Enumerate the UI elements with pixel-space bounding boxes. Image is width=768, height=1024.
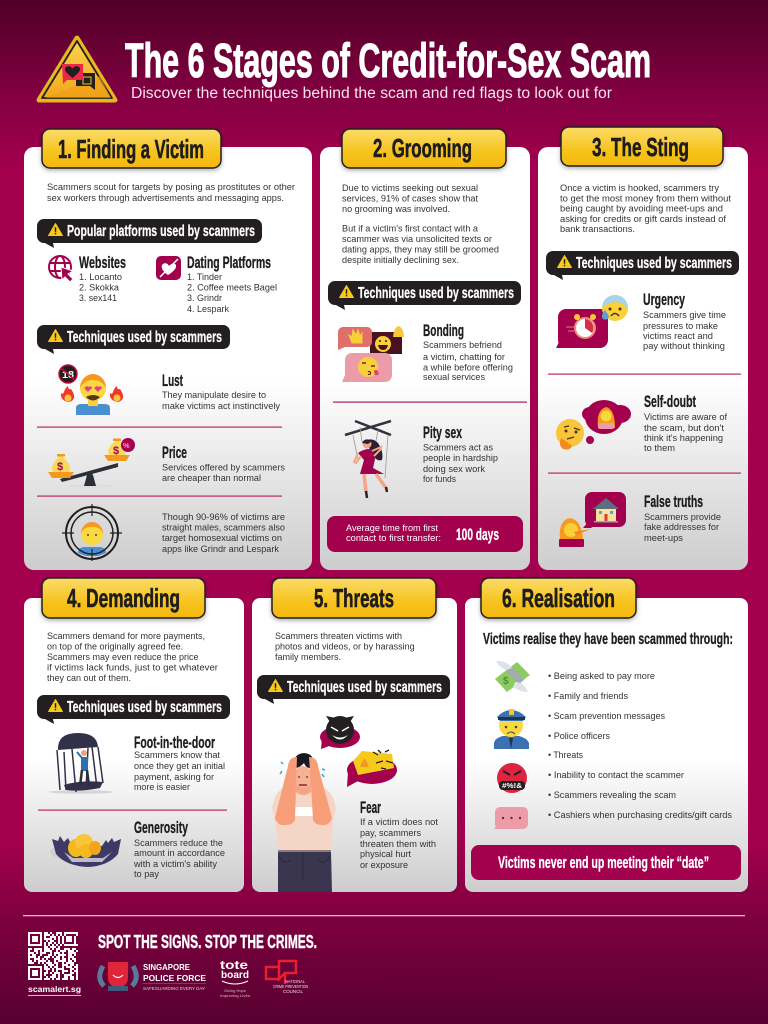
icon: weighing scale with money bags: % xyxy=(123,441,130,450)
icon: weighing scale with money bags: $ xyxy=(57,461,63,473)
heading: 2. Grooming xyxy=(342,129,506,168)
list of realisation triggers: • Family and friends xyxy=(548,691,628,701)
logo: Singapore Police Force: SAFEGUARDING EVERY DAY xyxy=(143,986,205,991)
icon: devil face bubble xyxy=(320,716,360,749)
heading: 4. Demanding xyxy=(42,578,205,618)
heading: 5. Threats: 5. Threats xyxy=(314,583,394,613)
pity sex text: for funds xyxy=(423,474,456,484)
banner: average time: 100 days xyxy=(456,526,499,544)
false truths text: fake addresses for xyxy=(644,522,719,532)
heading: 5. Threats xyxy=(272,578,436,618)
label: techniques: Techniques used by scammers xyxy=(287,679,442,696)
intro text: dating apps, they may still be groomed xyxy=(342,244,499,254)
logo: Tote Board xyxy=(220,958,250,998)
list of realisation triggers: • Being asked to pay more xyxy=(548,671,655,681)
icon: chat bubbles with emojis xyxy=(338,326,404,382)
self-doubt text: think it's happening xyxy=(644,433,723,443)
intro text: Due to victims seeking out sexual xyxy=(342,183,478,193)
intro text: on top of the originally agreed fee. xyxy=(47,642,183,652)
bonding text xyxy=(423,322,513,382)
icon: money with wings xyxy=(495,661,530,692)
icon: weighing scale with money bags xyxy=(48,438,135,488)
self-doubt text xyxy=(644,393,727,453)
price text: Price xyxy=(162,444,187,462)
panel: 3. The Sting xyxy=(538,127,748,570)
dating platforms list: 4. Lespark xyxy=(187,304,229,314)
label: techniques xyxy=(257,675,450,704)
intro text: Scammers threaten victims with xyxy=(275,631,402,641)
target text: apps like Grindr and Lespark xyxy=(162,544,280,554)
intro text: despite initially declining sex. xyxy=(342,255,459,265)
pity sex text: people in hardship xyxy=(423,453,498,463)
intro text: no grooming was involved. xyxy=(342,204,450,214)
heading: 1. Finding a Victim: 1. Finding a Victim xyxy=(58,134,204,164)
foot-in-the-door text xyxy=(134,734,225,792)
banner: average time: contact to first transfer: xyxy=(346,533,441,543)
icon: weighing scale with money bags: $ xyxy=(113,445,119,457)
fear text: If a victim does not xyxy=(360,817,439,827)
intro text: Scammers demand for more payments, xyxy=(47,631,205,641)
target text: target homosexual victims on xyxy=(162,533,282,543)
label: techniques xyxy=(328,281,521,310)
illustration: distressed man xyxy=(272,753,336,892)
icon: man in crosshair target xyxy=(62,504,122,561)
price text xyxy=(162,444,285,483)
foot-in-the-door text: Scammers know that xyxy=(134,750,221,760)
dating platforms list: 1. Tinder xyxy=(187,272,222,282)
heading: 2. Grooming: 2. Grooming xyxy=(373,133,472,163)
panel: 4. Demanding xyxy=(24,578,244,892)
heading: 6. Realisation: 6. Realisation xyxy=(502,583,615,613)
intro text: services, 91% of cases show that xyxy=(342,194,479,204)
logo: Singapore Police Force: POLICE FORCE xyxy=(143,973,206,983)
icon: money with wings: $ xyxy=(503,676,509,687)
logo: Singapore Police Force: SINGAPORE xyxy=(143,962,190,972)
generosity text: Generosity xyxy=(134,819,189,837)
icon: bear trap with coins xyxy=(50,834,121,867)
target text: straight males, scammers also xyxy=(162,522,285,532)
intro text: sex workers through advertisements and messaging apps. xyxy=(47,193,284,203)
logo: Tote Board: tote xyxy=(220,958,248,972)
intro text: Once a victim is hooked, scammers try xyxy=(560,183,720,193)
bonding text: sexual services xyxy=(423,372,485,382)
icon: woman puppet on strings xyxy=(345,421,391,498)
pity sex text xyxy=(423,424,498,484)
icon: lust face xyxy=(59,365,123,415)
intro text xyxy=(342,183,499,265)
intro text: asking for credits or gift cards instead of xyxy=(560,214,727,224)
intro text: photos and videos, or by harassing xyxy=(275,642,415,652)
self-doubt text: to them xyxy=(644,443,675,453)
intro text: they can out of them. xyxy=(47,673,131,683)
bonding text: a victim, chatting for xyxy=(423,352,505,362)
icon: swearing emoji: #%!& xyxy=(502,783,522,790)
label: popular platforms: Popular platforms used by scammers xyxy=(67,223,255,240)
dating platforms list: 3. Grindr xyxy=(187,293,222,303)
icon: thinking emoji with thought cloud xyxy=(556,400,631,450)
pity sex text: doing sex work xyxy=(423,464,486,474)
logo: Tote Board: Giving Hope xyxy=(224,988,247,993)
false truths text xyxy=(644,493,721,543)
websites list: 2. Skokka xyxy=(79,282,119,292)
subtitle: Discover the techniques behind the scam and red flags to look out for xyxy=(131,85,612,102)
intro text: scammer was via unsolicited texts or xyxy=(342,234,492,244)
heading: 3. The Sting: 3. The Sting xyxy=(592,132,689,162)
intro text xyxy=(560,183,732,234)
dating platforms list xyxy=(187,254,277,314)
foot-in-the-door text: payment, asking for xyxy=(134,772,214,782)
websites list xyxy=(79,254,126,303)
fear text xyxy=(360,799,439,870)
websites list: Websites xyxy=(79,254,126,272)
list of realisation triggers: • Scam prevention messages xyxy=(548,711,665,721)
fear text: or exposure xyxy=(360,860,408,870)
urgency text: victims react and xyxy=(643,331,713,341)
logo: Tote Board: Improving Lives xyxy=(220,993,250,998)
list of realisation triggers xyxy=(548,671,733,820)
intro text xyxy=(47,631,218,683)
icon: lying woman with house bubble xyxy=(559,492,626,547)
heading: 6. Realisation xyxy=(481,578,636,618)
fear text: threaten them with xyxy=(360,839,436,849)
intro text: family members. xyxy=(275,652,341,662)
intro text: But if a victim's first contact with a xyxy=(342,224,478,234)
label: techniques xyxy=(37,695,230,724)
dating platforms list: 2. Coffee meets Bagel xyxy=(187,282,277,292)
lust text: They manipulate desire to xyxy=(162,390,266,400)
generosity text: Scammers reduce the xyxy=(134,838,223,848)
banner: average time: Average time from first xyxy=(346,523,438,533)
pity sex text: Pity sex xyxy=(423,424,463,442)
list of realisation triggers: • Cashiers when purchasing credits/gift cards xyxy=(548,810,733,820)
slogan: SPOT THE SIGNS. STOP THE CRIMES. xyxy=(98,931,317,952)
label: techniques xyxy=(37,325,230,354)
foot-in-the-door text: more is easier xyxy=(134,782,190,792)
intro text: being caught by avoiding meet-ups and xyxy=(560,204,723,214)
dating platforms list: Dating Platforms xyxy=(187,254,271,272)
websites list: 3. sex141 xyxy=(79,293,117,303)
websites list: 1. Locanto xyxy=(79,272,122,282)
label: techniques: Techniques used by scammers xyxy=(67,699,222,716)
icon: warning triangle with chat bubbles xyxy=(39,38,115,100)
foot-in-the-door text: Foot-in-the-door xyxy=(134,734,215,752)
pity sex text: Scammers act as xyxy=(423,442,493,452)
icon: angry emoji bubble xyxy=(347,750,397,787)
target text: Though 90-96% of victims are xyxy=(162,512,285,522)
heading: 3. The Sting xyxy=(561,127,723,166)
fear text: physical hurt xyxy=(360,849,411,859)
label: popular platforms xyxy=(37,219,262,248)
label: techniques xyxy=(546,251,739,280)
urgency text: pressures to make xyxy=(643,321,718,331)
panel: 2. Grooming xyxy=(320,129,530,570)
icon: swearing emoji xyxy=(497,763,527,793)
fear text: Fear xyxy=(360,799,381,817)
icon: police officer xyxy=(494,709,529,749)
QR caption: scamalert.sg xyxy=(28,984,81,994)
panel: 5. Threats xyxy=(252,578,457,892)
foot-in-the-door text: once they get an initial xyxy=(134,761,225,771)
self-doubt text: Self-doubt xyxy=(644,393,696,411)
false truths text: meet-ups xyxy=(644,533,684,543)
heading: 1. Finding a Victim xyxy=(42,129,221,168)
panel: 6. Realisation xyxy=(465,578,748,892)
icon: globe with cursor xyxy=(49,256,73,282)
banner: never meet xyxy=(471,845,741,880)
false truths text: Scammers provide xyxy=(644,512,721,522)
logo: National Crime Prevention Council: NATIONAL xyxy=(285,979,306,984)
label: techniques: Techniques used by scammers xyxy=(358,285,514,302)
label: techniques: Techniques used by scammers xyxy=(67,329,222,346)
intro text xyxy=(275,631,415,662)
lust text: Lust xyxy=(162,372,183,390)
false truths text: False truths xyxy=(644,493,703,511)
generosity text: amount in accordance xyxy=(134,848,225,858)
fear text: pay, scammers xyxy=(360,828,421,838)
self-doubt text: the scam, but don't xyxy=(644,423,725,433)
bonding text: a while before offering xyxy=(423,362,513,372)
urgency text: Scammers give time xyxy=(643,310,726,320)
logo: National Crime Prevention Council: COUNCIL xyxy=(283,989,304,994)
target text xyxy=(162,512,285,554)
bonding text: Bonding xyxy=(423,322,464,340)
icon: lust face: 18 xyxy=(62,370,74,381)
intro text: Scammers may even reduce the price xyxy=(47,652,199,662)
lust text: make victims act instinctively xyxy=(162,401,281,411)
intro text: to get the most money from them without xyxy=(560,194,732,204)
list of realisation triggers: • Scammers revealing the scam xyxy=(548,790,676,800)
banner: average time xyxy=(327,516,523,552)
intro text: if victims lack funds, just to get whatever xyxy=(47,662,218,672)
urgency text: Urgency xyxy=(643,291,686,309)
heading: 4. Demanding: 4. Demanding xyxy=(67,583,180,613)
urgency text xyxy=(643,291,726,351)
icon: typing bubble xyxy=(494,807,528,829)
panel: 1. Finding a Victim xyxy=(24,129,312,570)
intro text: Scammers scout for targets by posing as prostitutes or other xyxy=(47,182,295,192)
list of realisation triggers: • Inability to contact the scammer xyxy=(548,770,684,780)
price text: Services offered by scammers xyxy=(162,462,285,472)
price text: are cheaper than normal xyxy=(162,473,261,483)
logo: National Crime Prevention Council xyxy=(266,961,308,994)
generosity text: to pay xyxy=(134,869,159,879)
logo: Singapore Police Force xyxy=(100,962,206,991)
icon: heart with arrow xyxy=(156,256,181,280)
list of realisation triggers: • Threats xyxy=(548,750,583,760)
intro text xyxy=(47,182,295,203)
urgency text: pay without thinking xyxy=(643,341,725,351)
self-doubt text: Victims are aware of xyxy=(644,412,727,422)
generosity text xyxy=(133,819,225,879)
QR code xyxy=(28,933,78,979)
generosity text: with a victim's ability xyxy=(133,859,217,869)
bonding text: Scammers befriend xyxy=(423,340,502,350)
intro text: bank transactions. xyxy=(560,224,635,234)
list of realisation triggers: • Police officers xyxy=(548,731,610,741)
icon: alarm clock bubble with worried emoji xyxy=(556,295,628,348)
logo: Tote Board: board xyxy=(221,970,249,981)
icon: man in cage xyxy=(49,733,113,794)
lust text xyxy=(162,372,281,411)
logo: National Crime Prevention Council: CRIME PREVENTION xyxy=(273,984,308,989)
